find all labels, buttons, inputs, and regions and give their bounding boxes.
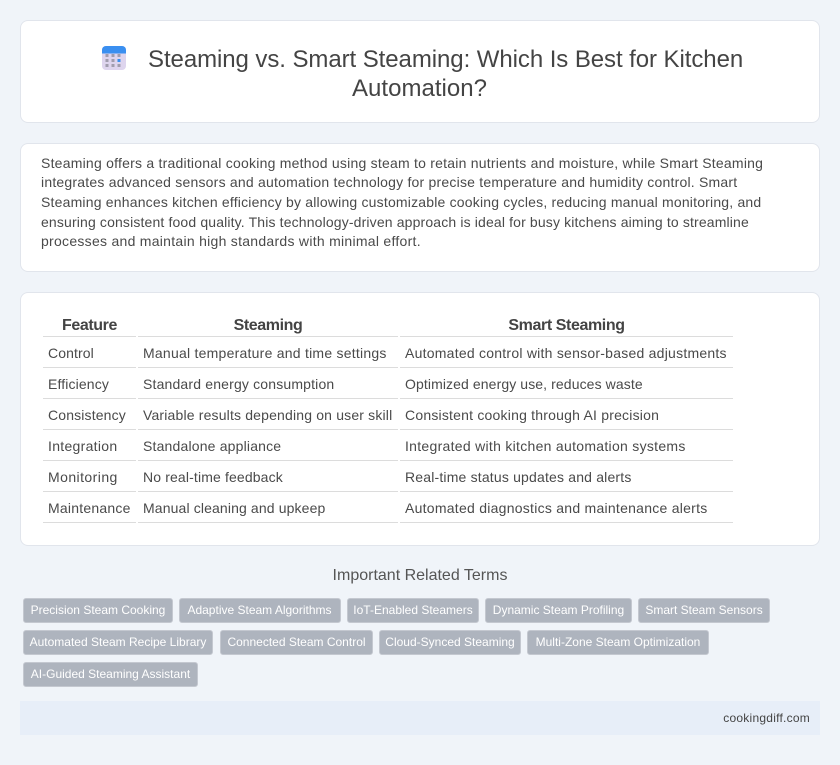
heading: Steaming vs. Smart Steaming: Which Is Best for Kitchen <box>148 46 743 73</box>
related term tags: Smart Steam Sensors <box>645 603 763 617</box>
related term tags: AI-Guided Steaming Assistant <box>31 667 190 681</box>
related term tags: Connected Steam Control <box>227 635 366 649</box>
panel: summary <box>20 143 820 272</box>
comparison table: Feature <box>62 317 117 334</box>
summary text: Steaming offers a traditional cooking method using steam to retain nutrients and moisture, while Smart Steaming <box>41 155 763 171</box>
comparison table: Consistency <box>48 407 126 423</box>
comparison table: Manual temperature and time settings <box>143 345 387 361</box>
summary text <box>41 155 763 249</box>
summary text: processes and maintain high standards with minimal effort. <box>41 233 421 249</box>
comparison table: Smart Steaming <box>508 317 625 334</box>
related term tags: Automated Steam Recipe Library <box>30 635 206 649</box>
comparison table: Steaming <box>234 317 302 334</box>
comparison table: Maintenance <box>48 500 131 516</box>
icon: calendar <box>102 46 126 70</box>
comparison table: Control <box>48 345 94 361</box>
comparison table: Monitoring <box>48 469 118 485</box>
summary text: Steaming enhances kitchen efficiency by allowing customizable cooking cycles, reducing manual monitoring, and <box>41 194 761 210</box>
comparison table <box>43 317 733 523</box>
comparison table: Automated control with sensor-based adjustments <box>405 345 727 361</box>
comparison table: Manual cleaning and upkeep <box>143 500 325 516</box>
comparison table: No real-time feedback <box>143 469 283 485</box>
comparison table: Integrated with kitchen automation systems <box>405 438 686 454</box>
summary text: ensuring consistent food quality. This technology-driven approach is ideal for busy kitchens aiming to streamline <box>41 214 749 230</box>
comparison table: Automated diagnostics and maintenance alerts <box>405 500 708 516</box>
panel: comparison table <box>20 292 820 546</box>
heading: Automation? <box>352 75 487 102</box>
comparison table: Standard energy consumption <box>143 376 334 392</box>
related term tags <box>23 598 770 687</box>
comparison table: Optimized energy use, reduces waste <box>405 376 643 392</box>
heading <box>148 46 743 102</box>
related term tags: Precision Steam Cooking <box>31 603 165 617</box>
summary text: integrates advanced sensors and automation technology for precise temperature and humidity control. Smart <box>41 174 737 190</box>
related term tags: Multi-Zone Steam Optimization <box>536 635 700 649</box>
footer <box>20 701 820 735</box>
panel: title <box>20 20 820 123</box>
related term tags: Adaptive Steam Algorithms <box>187 603 332 617</box>
comparison table: Variable results depending on user skill <box>143 407 392 423</box>
comparison table: Real-time status updates and alerts <box>405 469 632 485</box>
related term tags: Cloud-Synced Steaming <box>385 635 515 649</box>
heading: related terms: Important Related Terms <box>333 567 507 584</box>
related term tags: Dynamic Steam Profiling <box>493 603 624 617</box>
comparison table: Consistent cooking through AI precision <box>405 407 659 423</box>
comparison table: Integration <box>48 438 117 454</box>
footer source: cookingdiff.com <box>723 711 810 725</box>
related term tags: IoT-Enabled Steamers <box>353 603 473 617</box>
comparison table: Efficiency <box>48 376 109 392</box>
comparison table: Standalone appliance <box>143 438 281 454</box>
